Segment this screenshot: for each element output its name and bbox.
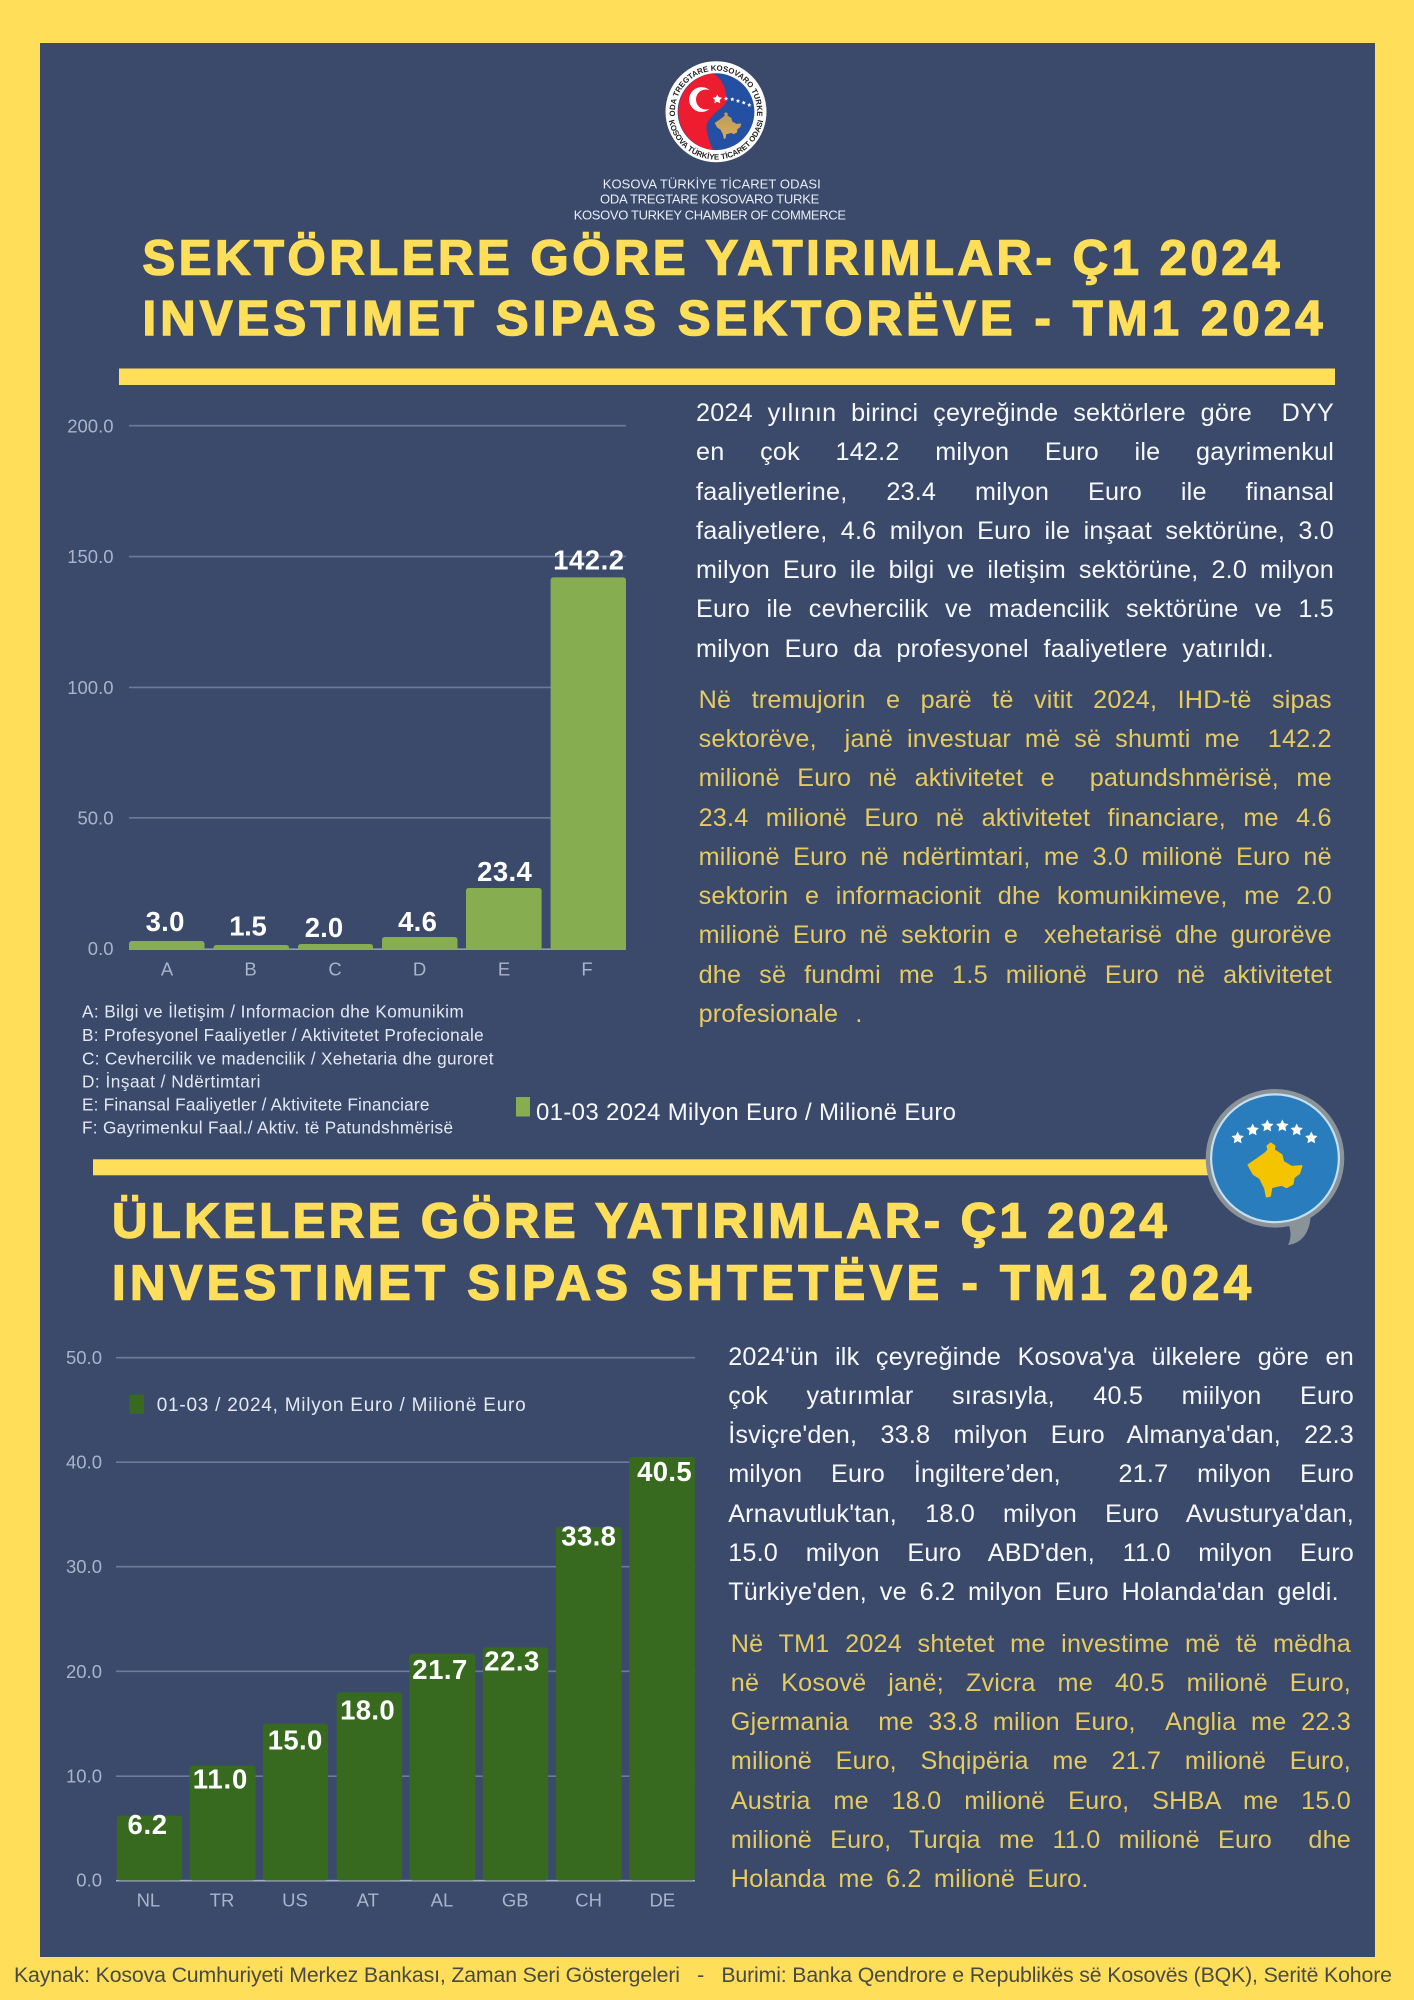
- bar chart: investments by country: 15.0: [268, 1724, 322, 1755]
- sector key list: F: Gayrimenkul Faal./ Aktiv. të Patundshmërisë: [82, 1118, 453, 1138]
- text block: sectors Turkish: faaliyetlerine, 23.4 milyon Euro ile finansal: [696, 478, 1334, 506]
- text block: sectors Turkish: milyon Euro da profesyonel faaliyetlere yatırıldı.: [696, 635, 1274, 663]
- text block: countries Turkish: [728, 1343, 1354, 1606]
- text block: sectors Albanian: milionë Euro në aktivitetet e patundshmërisë, me: [699, 764, 1332, 792]
- text block: sectors Albanian: dhe së fundmi me 1.5 milionë Euro në aktivitetet: [699, 961, 1332, 989]
- text block: countries Turkish: 15.0 milyon Euro ABD'den, 11.0 milyon Euro: [728, 1539, 1354, 1567]
- title: sectors: [142, 231, 1322, 346]
- text block: countries Turkish: İsviçre'den, 33.8 milyon Euro Almanya'dan, 22.3: [728, 1421, 1354, 1449]
- bar chart: investments by sector: A: [161, 958, 174, 979]
- bar chart: investments by sector: 150.0: [67, 546, 114, 567]
- bar chart: investments by sector: 0.0: [88, 938, 114, 959]
- bar chart: investments by country: 40.0: [66, 1452, 102, 1473]
- text block: countries Albanian: në Kosovë janë; Zvicra me 40.5 milionë Euro,: [731, 1669, 1351, 1697]
- title: sectors: SEKTÖRLERE GÖRE YATIRIMLAR- Ç1 2024: [142, 231, 1280, 285]
- sector key list: C: Cevhercilik ve madencilik / Xehetaria dhe guroret: [82, 1048, 494, 1068]
- text block: countries Turkish: Arnavutluk'tan, 18.0 milyon Euro Avusturya'dan,: [728, 1500, 1354, 1528]
- text block: sectors Albanian: milionë Euro në ndërtimtari, me 3.0 milionë Euro në: [699, 843, 1332, 871]
- organisation names: [574, 176, 846, 222]
- text block: sectors Albanian: profesionale .: [699, 1000, 863, 1028]
- bar chart: investments by sector: D: [413, 958, 426, 979]
- divider bar: second section: [93, 1159, 1218, 1175]
- bar chart: investments by country: TR: [210, 1889, 234, 1910]
- organisation names: KOSOVO TURKEY CHAMBER OF COMMERCE: [574, 207, 846, 222]
- bar chart: investments by sector: 200.0: [67, 416, 114, 436]
- text block: sectors Turkish: en çok 142.2 milyon Euro ile gayrimenkul: [696, 438, 1334, 466]
- text block: sectors Albanian: 23.4 milionë Euro në aktivitetet financiare, me 4.6: [699, 804, 1332, 832]
- sector key list: E: Finansal Faaliyetler / Aktivitete Financiare: [82, 1094, 429, 1114]
- sector key list: [82, 1002, 494, 1138]
- sector key list: B: Profesyonel Faaliyetler / Aktivitetet Profecionale: [82, 1025, 484, 1045]
- bar chart: investments by country: 10.0: [66, 1766, 102, 1787]
- text block: sectors Turkish: faaliyetlere, 4.6 milyon Euro ile inşaat sektörüne, 3.0: [696, 517, 1334, 545]
- bar chart: investments by sector: 2.0: [305, 912, 343, 943]
- chart legend: countries: 01-03 / 2024, Milyon Euro / Milionë Euro: [157, 1395, 526, 1416]
- text block: countries Albanian: Holanda me 6.2 milionë Euro.: [731, 1865, 1089, 1893]
- title: countries: ÜLKELERE GÖRE YATIRIMLAR- Ç1 2024: [112, 1194, 1167, 1248]
- icon: Kosovo flag speech bubble: [1206, 1089, 1344, 1245]
- bar chart: investments by sector: E: [498, 958, 510, 979]
- bar chart: investments by sector: [67, 416, 626, 979]
- bar chart: investments by sector: 1.5: [229, 911, 267, 942]
- text block: sectors Turkish: [696, 399, 1334, 663]
- bar chart: investments by sector: 50.0: [77, 808, 114, 828]
- bar chart: investments by country: NL: [137, 1889, 160, 1910]
- text block: countries Albanian: milionë Euro, Shqipëria me 21.7 milionë Euro,: [731, 1747, 1351, 1775]
- bar chart: investments by country: 33.8: [561, 1520, 616, 1552]
- text block: countries Albanian: Gjermania me 33.8 milion Euro, Anglia me 22.3: [731, 1708, 1351, 1736]
- text block: sectors Albanian: [699, 686, 1332, 1028]
- bar chart: investments by country: DE: [649, 1889, 675, 1910]
- chart legend: sectors: 01-03 2024 Milyon Euro / Milionë Euro: [536, 1099, 956, 1126]
- title: sectors: INVESTIMET SIPAS SEKTORËVE - TM1 2024: [142, 292, 1322, 346]
- bar chart: investments by sector: F: [581, 958, 593, 979]
- bar chart: investments by country: 21.7: [412, 1654, 467, 1685]
- text block: countries Turkish: 2024'ün ilk çeyreğinde Kosova'ya ülkelere göre en: [728, 1343, 1354, 1371]
- bar chart: investments by sector: B: [244, 958, 257, 979]
- text block: sectors Albanian: Në tremujorin e parë të vitit 2024, IHD-të sipas: [699, 686, 1332, 714]
- divider bar: top section: [119, 368, 1335, 385]
- organisation names: KOSOVA TÜRKİYE TİCARET ODASI: [603, 176, 821, 191]
- bar chart: investments by country: 6.2: [128, 1809, 167, 1840]
- bar chart: investments by country: AT: [357, 1889, 379, 1910]
- logo: Kosovo Turkey chamber of commerce: KOSOVA TÜRKİYE TİCARET ODASI: [668, 120, 764, 160]
- bar chart: investments by country: CH: [575, 1889, 602, 1910]
- bar chart: investments by country: [66, 1347, 695, 1910]
- text block: sectors Turkish: Euro ile cevhercilik ve madencilik sektörüne ve 1.5: [696, 595, 1334, 623]
- sector key list: A: Bilgi ve İletişim / Informacion dhe Komunikim: [82, 1002, 464, 1022]
- text block: countries Turkish: milyon Euro İngiltere’den, 21.7 milyon Euro: [728, 1460, 1354, 1488]
- bar chart: investments by country: GB: [502, 1889, 529, 1910]
- text block: countries Turkish: Türkiye'den, ve 6.2 milyon Euro Holanda'dan geldi.: [728, 1578, 1339, 1606]
- text block: sectors Albanian: sektorin e informacionit dhe komunikimeve, me 2.0: [699, 882, 1332, 910]
- text block: sectors Albanian: sektorëve, janë investuar më së shumti me 142.2: [699, 725, 1332, 753]
- source footer: Kaynak: Kosova Cumhuriyeti Merkez Bankası, Zaman Seri Göstergeleri - Burimi: Banka Qendrore e Republikës së Kosovës (BQK), Seritë Kohore: [14, 1963, 1392, 1987]
- organisation names: ODA TREGTARE KOSOVARO TURKE: [600, 191, 820, 206]
- text block: sectors Albanian: milionë Euro në sektorin e xehetarisë dhe gurorëve: [699, 921, 1332, 949]
- bar chart: investments by country: 40.5: [637, 1456, 692, 1487]
- bar chart: investments by country: 18.0: [340, 1694, 395, 1725]
- sector key list: D: İnşaat / Ndërtimtari: [82, 1072, 260, 1092]
- bar chart: investments by sector: 100.0: [67, 677, 114, 698]
- text block: countries Albanian: Në TM1 2024 shtetet me investime më të mëdha: [731, 1630, 1351, 1658]
- logo: Kosovo Turkey chamber of commerce: ODA TREGTARE KOSOVARO TURKE: [670, 65, 762, 116]
- bar chart: investments by country: 11.0: [193, 1763, 247, 1794]
- bar chart: investments by sector: C: [328, 958, 342, 979]
- title: countries: INVESTIMET SIPAS SHTETËVE - TM1 2024: [112, 1256, 1251, 1310]
- bar chart: investments by sector: 142.2: [553, 545, 624, 576]
- text block: countries Albanian: milionë Euro, Turqia me 11.0 milionë Euro dhe: [731, 1826, 1351, 1854]
- bar chart: investments by country: 20.0: [66, 1661, 102, 1682]
- text block: countries Albanian: Austria me 18.0 milionë Euro, SHBA me 15.0: [731, 1787, 1351, 1815]
- bar chart: investments by country: 22.3: [484, 1645, 539, 1676]
- bar chart: investments by country: 0.0: [76, 1870, 102, 1891]
- text block: countries Turkish: çok yatırımlar sırasıyla, 40.5 miilyon Euro: [728, 1382, 1354, 1410]
- title: countries: [112, 1194, 1251, 1310]
- bar chart: investments by sector: 4.6: [398, 906, 437, 937]
- bar chart: investments by country: 30.0: [66, 1556, 102, 1577]
- text block: countries Albanian: [730, 1630, 1351, 1893]
- bar chart: investments by country: AL: [431, 1889, 453, 1910]
- text block: sectors Turkish: 2024 yılının birinci çeyreğinde sektörlere göre DYY: [696, 399, 1334, 427]
- bar chart: investments by sector: 23.4: [477, 856, 533, 887]
- text block: sectors Turkish: milyon Euro ile bilgi ve iletişim sektörüne, 2.0 milyon: [696, 556, 1334, 584]
- bar chart: investments by sector: 3.0: [146, 906, 184, 937]
- bar chart: investments by country: US: [282, 1889, 308, 1910]
- bar chart: investments by country: 50.0: [66, 1347, 102, 1368]
- logo: Kosovo Turkey chamber of commerce: [666, 61, 766, 162]
